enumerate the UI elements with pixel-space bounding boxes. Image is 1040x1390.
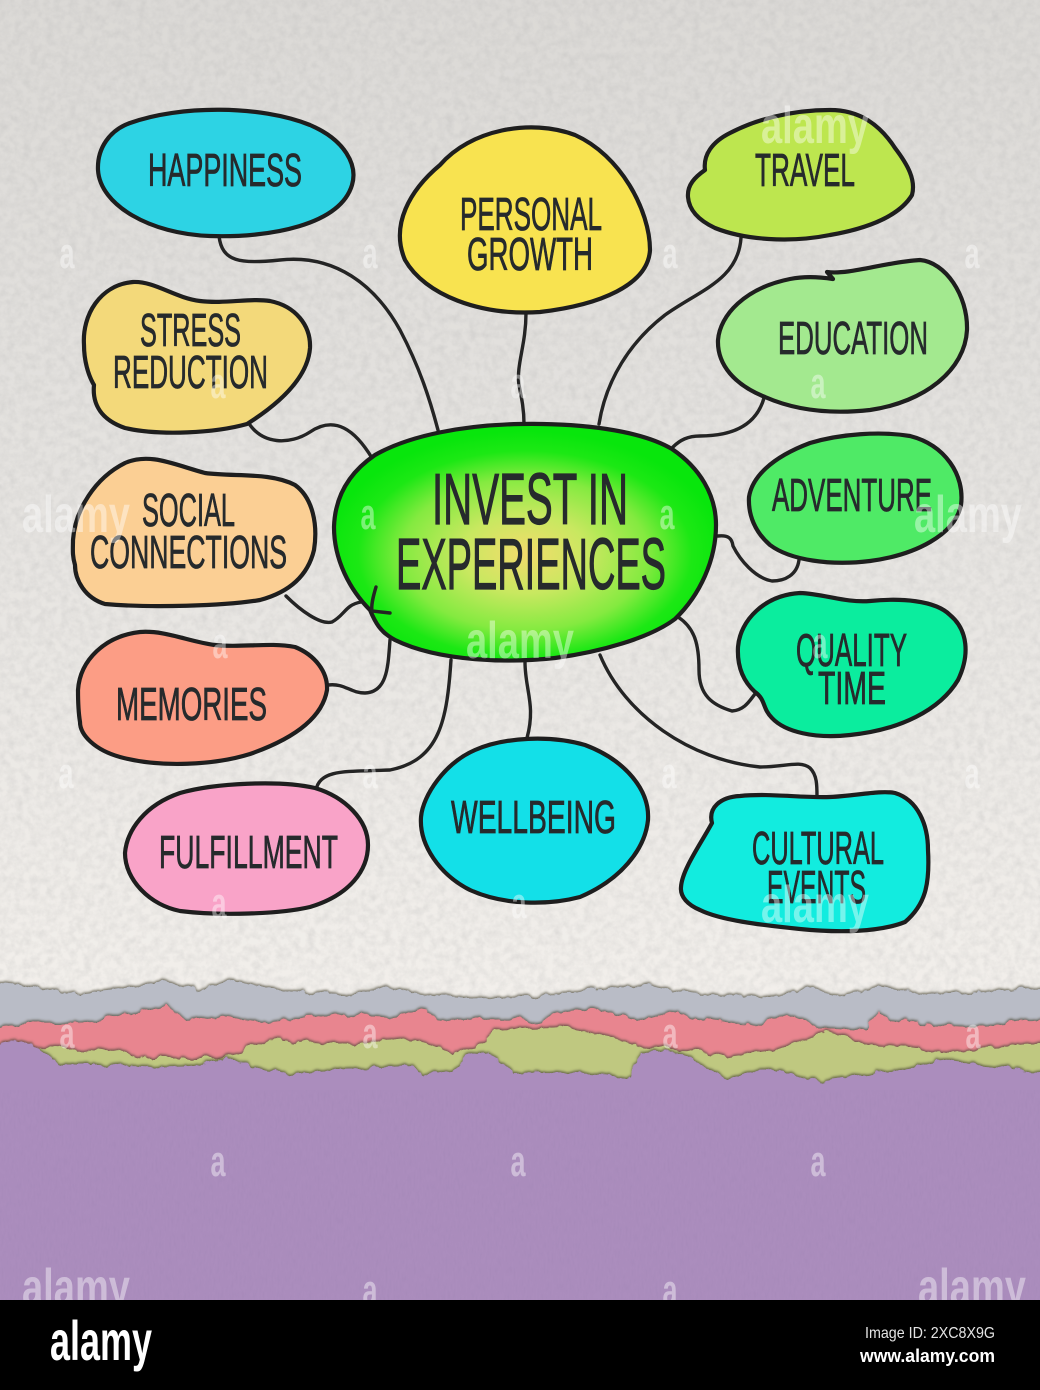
node: social connections bbox=[73, 459, 315, 606]
background: handmade paper bbox=[0, 0, 1040, 1000]
watermark marks: a bbox=[510, 1137, 526, 1186]
central blob bbox=[334, 424, 716, 660]
node: stress reduction bbox=[84, 282, 310, 433]
watermark marks: a bbox=[212, 879, 227, 928]
watermark marks: a bbox=[362, 1266, 378, 1315]
node: education: EDUCATION bbox=[778, 312, 928, 364]
watermark marks: alamy bbox=[761, 97, 869, 155]
watermark marks: a bbox=[362, 749, 378, 798]
watermark marks: a bbox=[964, 229, 980, 278]
watermark marks: a bbox=[810, 359, 826, 408]
watermark marks: a bbox=[512, 879, 527, 928]
watermark marks: a bbox=[362, 1009, 378, 1058]
footer logo: alamy bbox=[50, 1309, 152, 1372]
torn layer: pink bbox=[0, 1005, 1040, 1090]
node: cultural events: CULTURAL bbox=[752, 822, 884, 874]
node: personal growth: GROWTH bbox=[467, 228, 593, 280]
node: cultural events: EVENTS bbox=[767, 861, 866, 913]
connector lines bbox=[219, 236, 817, 797]
watermark marks: alamy bbox=[22, 1259, 130, 1317]
small pen tick bbox=[372, 587, 390, 613]
node: stress reduction: REDUCTION bbox=[113, 346, 268, 398]
watermark marks: a bbox=[812, 619, 828, 668]
watermark marks: a bbox=[212, 619, 228, 668]
node: personal growth bbox=[400, 127, 650, 312]
node: wellbeing: WELLBEING bbox=[451, 791, 616, 843]
watermark marks: a bbox=[210, 359, 226, 408]
watermark marks: a bbox=[58, 749, 74, 798]
watermark marks: alamy bbox=[761, 876, 869, 934]
node: social connections: CONNECTIONS bbox=[90, 526, 287, 578]
node: personal growth: PERSONAL bbox=[460, 188, 602, 240]
website: www.alamy.com bbox=[859, 1346, 995, 1366]
watermark marks: alamy bbox=[466, 612, 574, 670]
torn layer: olive green bbox=[40, 1027, 1040, 1110]
watermark marks: a bbox=[60, 1009, 75, 1058]
torn layer: gray bbox=[0, 980, 1040, 1060]
torn paper layers bbox=[0, 980, 1040, 1320]
central title: EXPERIENCES bbox=[396, 525, 666, 605]
watermark marks: a bbox=[60, 229, 75, 278]
watermark marks: alamy bbox=[22, 486, 130, 544]
watermark marks: a bbox=[362, 229, 378, 278]
watermark marks: a bbox=[660, 490, 675, 539]
node: travel bbox=[688, 110, 913, 239]
node: happiness: HAPPINESS bbox=[148, 144, 302, 196]
watermark marks: a bbox=[966, 1009, 981, 1058]
node: social connections: SOCIAL bbox=[142, 484, 235, 536]
node: travel: TRAVEL bbox=[755, 144, 855, 196]
watermark marks: a bbox=[662, 749, 677, 798]
node: wellbeing bbox=[421, 739, 648, 903]
watermark marks: a bbox=[210, 1137, 226, 1186]
node: cultural events bbox=[681, 792, 928, 931]
node: quality time: TIME bbox=[818, 662, 886, 714]
central topic: invest in experiences bbox=[334, 424, 716, 660]
node: stress reduction: STRESS bbox=[140, 304, 241, 356]
image id: Image ID: 2XC8X9G bbox=[865, 1325, 995, 1342]
node: happiness bbox=[98, 110, 353, 236]
node: fulfillment bbox=[125, 783, 368, 914]
node: quality time bbox=[738, 593, 966, 736]
torn layer: purple bbox=[0, 1040, 1040, 1320]
watermark marks: a bbox=[510, 359, 526, 408]
node: adventure bbox=[749, 434, 962, 563]
node: memories: MEMORIES bbox=[116, 678, 267, 730]
watermark marks: a bbox=[662, 1266, 678, 1315]
node: education bbox=[718, 260, 967, 412]
watermark marks: a bbox=[662, 1009, 678, 1058]
watermark marks: a bbox=[810, 1137, 826, 1186]
node: quality time: QUALITY bbox=[796, 624, 907, 676]
node: memories bbox=[78, 632, 327, 764]
footer bar bbox=[0, 1300, 1040, 1390]
node: fulfillment: FULFILLMENT bbox=[159, 826, 338, 878]
watermark marks: a bbox=[662, 229, 678, 278]
watermark marks: a bbox=[964, 749, 980, 798]
central title: INVEST IN bbox=[432, 460, 628, 540]
watermark marks: a bbox=[360, 490, 376, 539]
